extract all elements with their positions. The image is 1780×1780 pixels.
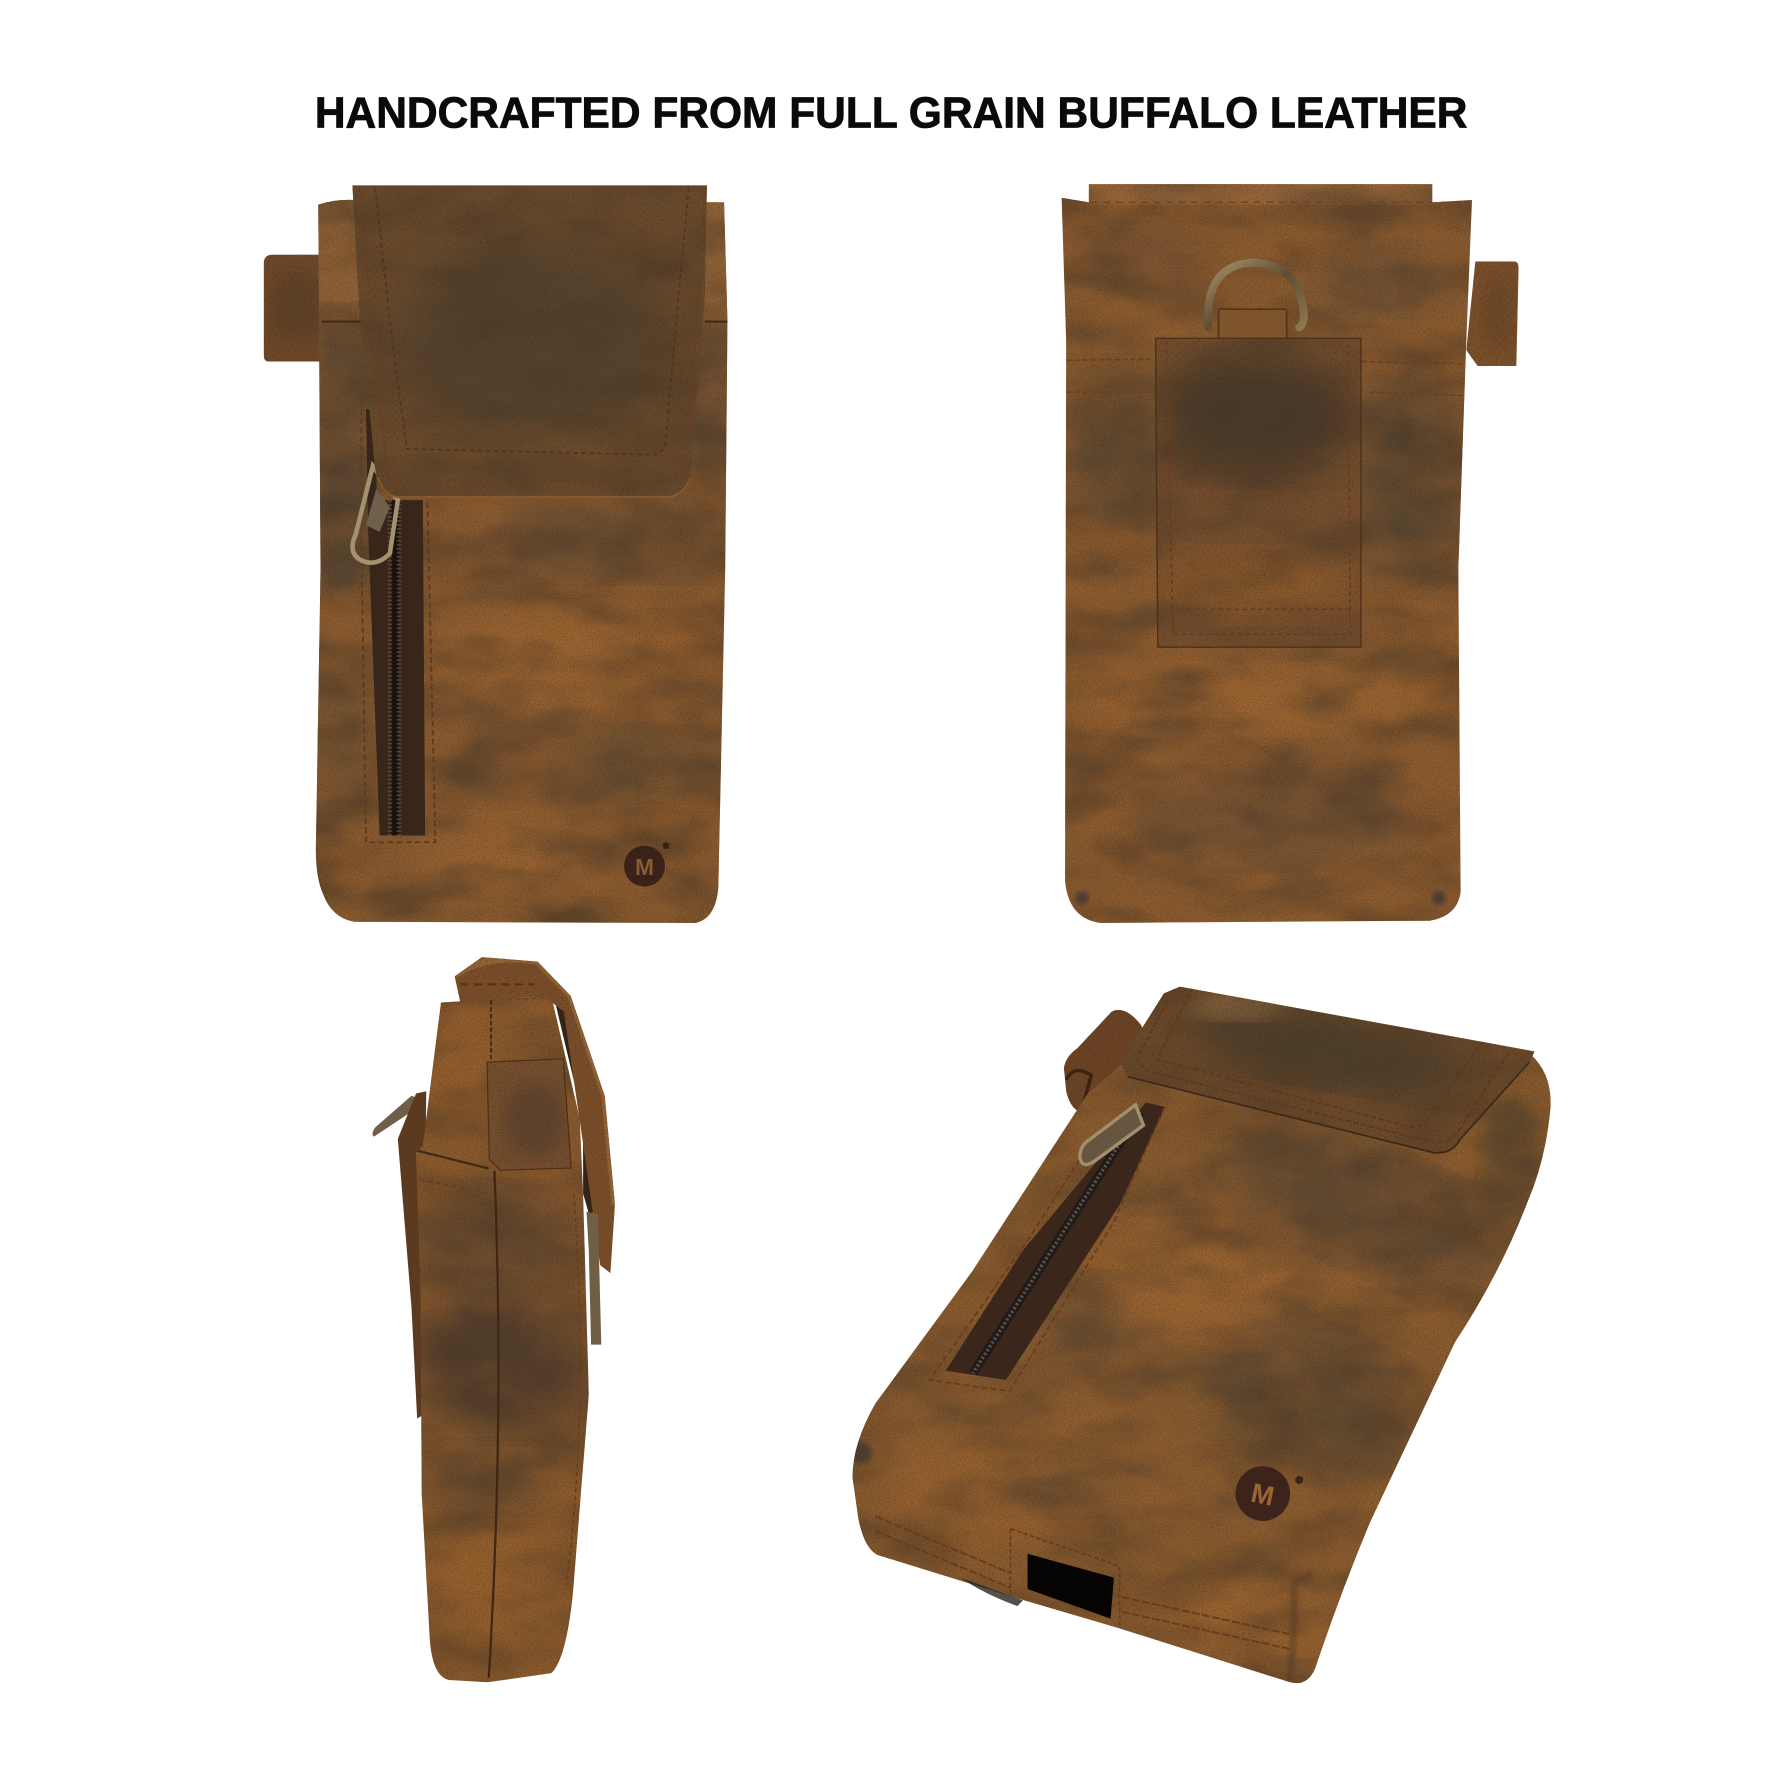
underside shadow [960,1578,1023,1606]
pen loop [264,254,320,362]
logo stamp: M [1248,1477,1277,1512]
flap edge [449,949,619,1279]
side buckle [587,1212,601,1345]
pen loop [1466,261,1518,366]
pouch body [852,1056,1551,1684]
zipper [361,400,435,842]
zipper pull [1080,1105,1143,1165]
zipper pull [352,466,398,563]
black window [1028,1554,1114,1619]
pouch body [1051,180,1483,930]
flap [352,185,707,498]
product view: front of pouch [259,176,739,932]
top opening [464,984,554,1000]
pouch body [409,989,597,1688]
pouch body [307,193,739,932]
logo stamp [1236,1466,1303,1521]
title: HANDCRAFTED FROM FULL GRAIN BUFFALO LEATHER [315,89,1467,137]
pen loop [486,1058,572,1171]
belt flap [1154,338,1362,648]
product view: back of pouch [1051,180,1523,930]
product view: angled pouch [841,978,1557,1694]
logo stamp [624,842,669,887]
belt strap [398,1091,426,1419]
D-ring [372,1096,421,1137]
logo stamp: M [635,854,654,880]
zipper [930,1103,1165,1391]
D-ring [1208,263,1304,327]
ring tab [1218,309,1287,341]
pen loop [1064,1010,1142,1110]
flap [1122,986,1534,1154]
shadow under flap [555,1000,609,1262]
product view: side of pouch [372,949,619,1688]
